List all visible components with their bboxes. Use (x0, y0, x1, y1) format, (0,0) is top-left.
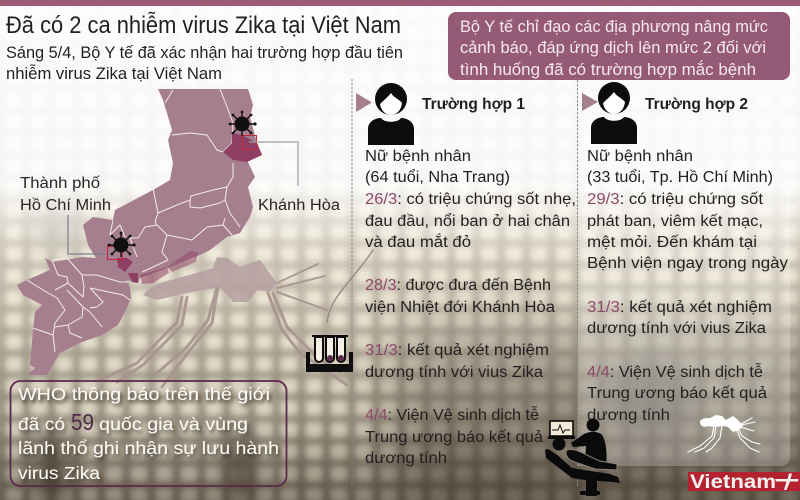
Khánh Hòa marker and leader line (242, 136, 298, 186)
callout: WHO statistic (10, 381, 286, 486)
case 2 header: Trường hợp 2 (645, 96, 748, 113)
logo: Vietnam+: Vietnam (690, 472, 776, 493)
case 2 timeline text: 4/4: Viện Vệ sinh dịch tễ (587, 364, 763, 381)
case 1 timeline text: dương tính với vius Zika (365, 364, 543, 381)
case 2 timeline text: (33 tuổi, Tp. Hồ Chí Minh) (587, 169, 773, 186)
callout: WHO statistic: đã có (18, 414, 65, 434)
callout: health ministry directive: Bộ Y tế chỉ đạo các địa phương nâng mức (460, 17, 768, 36)
case 2 timeline text: Bệnh viện ngay trong ngày (587, 255, 788, 272)
callout: health ministry directive: cảnh báo, đáp ứng dịch lên mức 2 đối với (460, 38, 766, 57)
map: southern Vietnam provinces (17, 89, 262, 375)
case 2 timeline text: dương tính (587, 407, 670, 424)
case 1 timeline text: (64 tuổi, Nha Trang) (365, 169, 510, 186)
icon: white mosquito (688, 415, 760, 452)
map: Khánh Hòa highlighted province (223, 133, 262, 162)
icon: doctor with patient (545, 418, 620, 496)
label: Thành phố Hồ Chí Minh: Thành phố (20, 175, 100, 192)
subtitle (6, 44, 403, 83)
HCMC marker and leader line (68, 215, 122, 260)
case 2 timeline text (587, 148, 788, 424)
case 1 timeline text: viện Nhiệt đới Khánh Hòa (365, 299, 555, 316)
top bar (0, 0, 800, 6)
logo: Vietnam+ (688, 472, 800, 493)
callout: WHO statistic: 59 (71, 409, 94, 435)
callout: WHO statistic: lãnh thổ ghi nhận sự lưu hành (18, 438, 279, 458)
subtitle: Sáng 5/4, Bộ Y tế đã xác nhận hai trường hợp đầu tiên (6, 44, 403, 62)
callout: WHO statistic: quốc gia và vùng (99, 414, 248, 434)
icon: test tubes (306, 336, 353, 372)
case 1 timeline text: đau đầu, nổi ban ở hai chân (365, 213, 570, 230)
case 2 timeline text: 29/3: có triệu chứng sốt (587, 191, 764, 208)
callout: WHO statistic: WHO thông báo trên thế giới (18, 384, 270, 404)
callout: WHO statistic: virus Zika (18, 463, 100, 483)
case 1 header (356, 83, 525, 145)
case 1 timeline text (365, 148, 576, 467)
title: Đã có 2 ca nhiễm virus Zika tại Việt Nam (6, 12, 401, 39)
case 1 timeline text: Nữ bệnh nhân (365, 148, 471, 165)
icon: virus on Khánh Hòa (229, 111, 257, 136)
case 1 timeline text: Trung ương báo kết quả (365, 429, 543, 446)
case 1 timeline text: 4/4: Viện Vệ sinh dịch tễ (365, 407, 539, 424)
case 1 timeline text: dương tính (365, 450, 447, 467)
case 1 timeline text: và đau mắt đỏ (365, 234, 471, 251)
panel: translucent right column (578, 80, 790, 466)
map: highlighted southern coast provinces (117, 251, 198, 284)
column dividers (352, 79, 578, 486)
case 2 timeline text: Trung ương báo kết quả (587, 385, 767, 402)
case 1 header: Trường hợp 1 (422, 96, 525, 113)
case 1 timeline text: 28/3: được đưa đến Bệnh (365, 277, 551, 294)
large mosquito silhouette (100, 250, 373, 387)
case 2 timeline text: dương tính với vius Zika (587, 320, 766, 337)
case 1 timeline text: 31/3: kết quả xét nghiệm (365, 342, 549, 359)
callout: health ministry directive (448, 12, 790, 80)
case 1 timeline text: 26/3: có triệu chứng sốt nhẹ, (365, 191, 576, 208)
callout: health ministry directive: tình huống đã có trường hợp mắc bệnh (460, 60, 756, 79)
case 2 timeline text: 31/3: kết quả xét nghiệm (587, 299, 772, 316)
icon: virus on HCMC (108, 232, 136, 257)
case 2 timeline text: mệt mỏi. Đến khám tại (587, 234, 757, 251)
label: Khánh Hòa: Khánh Hòa (258, 197, 340, 214)
label: Thành phố Hồ Chí Minh: Hồ Chí Minh (20, 197, 111, 214)
case 2 timeline text: phát ban, viêm kết mạc, (587, 213, 763, 230)
label: Thành phố Hồ Chí Minh (20, 175, 111, 214)
case 2 header (582, 82, 748, 144)
subtitle: nhiễm virus Zika tại Việt Nam (6, 64, 222, 83)
case 2 timeline text: Nữ bệnh nhân (587, 148, 693, 165)
